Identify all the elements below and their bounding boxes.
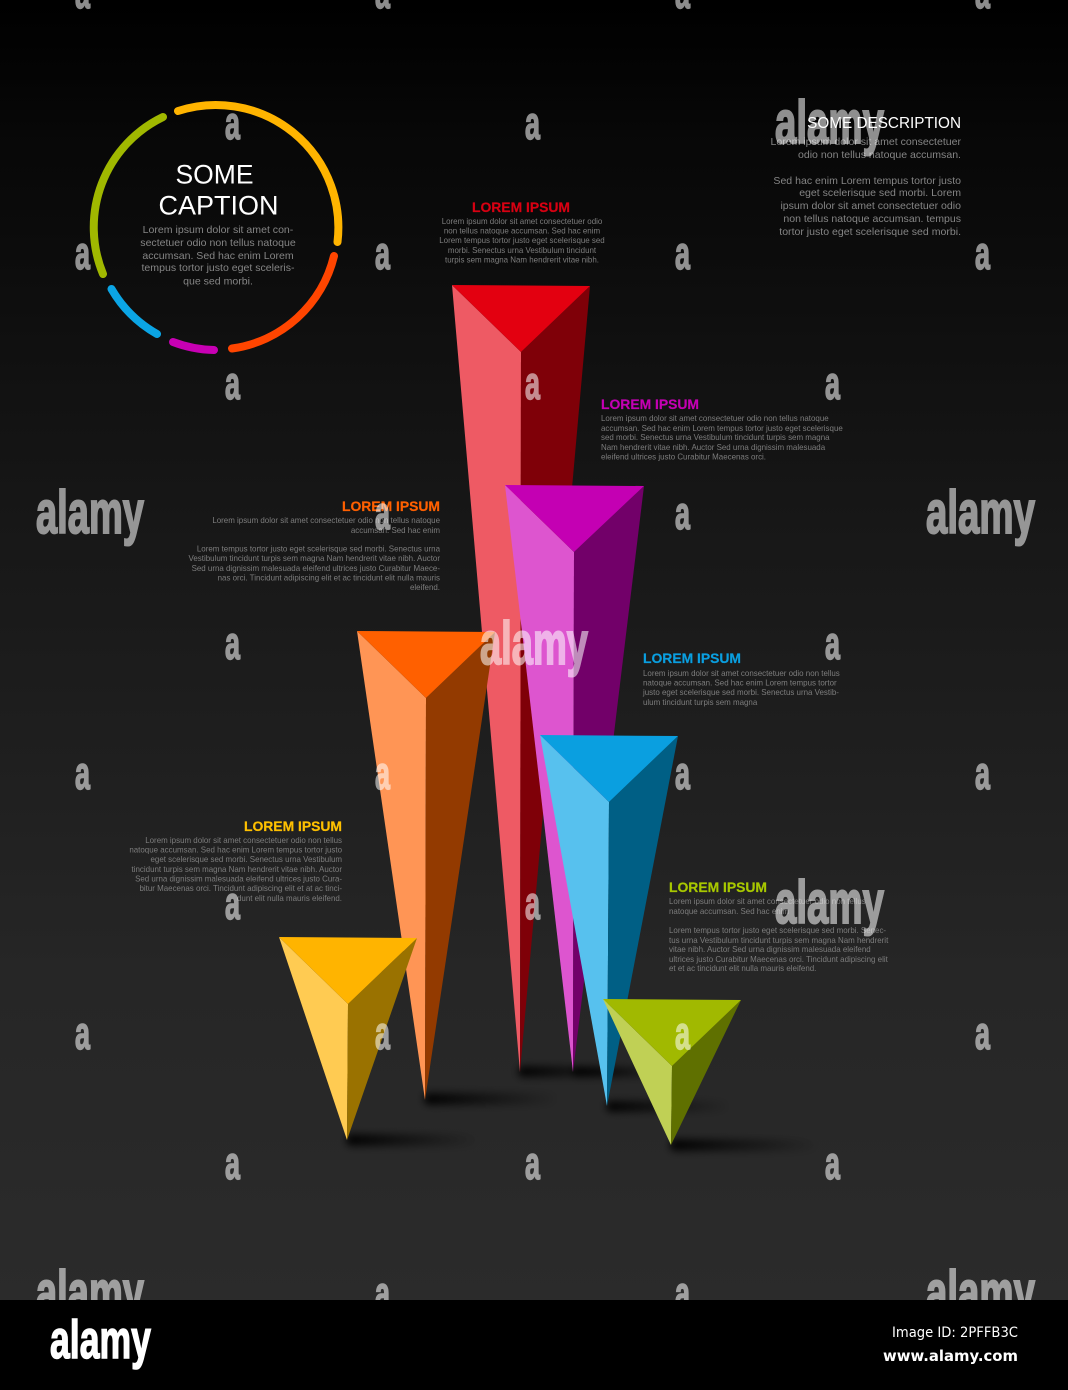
description body: ipsum dolor sit amet consectetuer odio [780, 200, 961, 212]
footer bar [0, 1300, 1068, 1390]
watermark overlay: a [975, 747, 990, 799]
watermark overlay: a [375, 227, 390, 279]
caption heading: SOME [175, 160, 254, 190]
watermark overlay: a [75, 747, 90, 799]
pyramid: magenta [505, 485, 644, 1072]
watermark overlay: a [225, 357, 240, 409]
watermark overlay: a [825, 1137, 840, 1189]
description heading: SOME DESCRIPTION [807, 115, 961, 132]
heading: LOREM IPSUM [472, 199, 570, 215]
caption body: que sed morbi. [183, 276, 253, 288]
body: Lorem ipsum dolor sit amet consectetuer odio non tellus natoque [212, 516, 441, 525]
yellow label [129, 818, 343, 903]
body: Nam hendrerit vitae nibh. Auctor Sed urna dignissim malesuada [601, 443, 826, 452]
body: eleifend. [410, 583, 440, 592]
watermark overlay: a [375, 487, 390, 539]
body: eget scelerisque sed morbi. Senectus urna Vestibulum [150, 855, 342, 864]
description body: non tellus natoque accumsan. tempus [783, 213, 961, 225]
body: Sed urna dignissim malesuada eleifend ultrices justo Curabitur Maece- [192, 564, 440, 573]
caption body: sectetuer odio non tellus natoque [140, 237, 296, 249]
watermark overlay: a [225, 617, 240, 669]
heading: LOREM IPSUM [601, 396, 699, 412]
body: Vestibulum tincidunt turpis sem magna Nam hendrerit vitae nibh. Auctor [189, 554, 440, 563]
watermark overlay: a [225, 877, 240, 929]
footer logo: alamy [50, 1310, 151, 1370]
body: natoque accumsan. Sed hac enim Lorem tempus tortor justo [129, 846, 343, 854]
body: Lorem tempus tortor justo eget scelerisque sed morbi. Senec- [669, 926, 886, 935]
body: Lorem ipsum dolor sit amet consectetuer odio [442, 217, 603, 226]
watermark overlay: a [675, 1007, 690, 1059]
watermark overlay: alamy [775, 89, 884, 156]
description body: tortor justo eget scelerisque sed morbi. [779, 226, 961, 238]
watermark overlay: alamy [36, 1259, 144, 1326]
watermark overlay: a [675, 227, 690, 279]
watermark overlay: a [375, 747, 390, 799]
caption body: Lorem ipsum dolor sit amet con- [143, 224, 294, 236]
watermark overlay: a [675, 747, 690, 799]
body: Lorem ipsum dolor sit amet consectetuer odio non tellus [643, 669, 840, 678]
watermark overlay: a [75, 1007, 90, 1059]
body: Lorem ipsum dolor sit amet consectetuer odio non tellus [669, 897, 866, 906]
description block [770, 115, 961, 238]
body: accumsan. Sed hac enim [351, 526, 440, 535]
watermark overlay: a [375, 1007, 390, 1059]
heading: LOREM IPSUM [643, 650, 741, 666]
body: nas orci. Tincidunt adipiscing elit et ac tincidunt elit nulla mauris [218, 574, 440, 582]
body: Sed urna dignissim malesuada eleifend ultrices justo Cura- [135, 874, 342, 884]
watermark overlay: alamy [480, 610, 588, 677]
body: tincidunt turpis sem magna Nam hendrerit vitae nibh. Auctor [132, 865, 342, 874]
watermark overlay: a [525, 1137, 540, 1189]
body: justo eget scelerisque sed morbi. Senectus urna Vestib- [642, 688, 839, 697]
circular caption badge [94, 105, 338, 350]
body: Lorem ipsum dolor sit amet consectetuer odio non tellus [145, 836, 342, 845]
watermark overlay: a [975, 227, 990, 279]
watermark overlay: a [675, 487, 690, 539]
watermark overlay: a [825, 357, 840, 409]
body: natoque accumsan. Sed hac enim Lorem tempus tortor [643, 678, 837, 688]
body: natoque accumsan. Sed hac enim [669, 907, 789, 916]
watermark overlay: alamy [36, 479, 144, 546]
caption heading: CAPTION [158, 190, 279, 220]
body: morbi. Senectus urna Vestibulum tincidunt [448, 246, 597, 255]
description body: odio non tellus natoque accumsan. [798, 149, 961, 161]
watermark overlay: a [75, 227, 90, 279]
watermark overlay: a [525, 877, 540, 929]
heading: LOREM IPSUM [244, 818, 342, 834]
description body: Lorem ipsum dolor sit amet consectetuer [770, 136, 961, 148]
magenta label [601, 396, 843, 462]
heading: LOREM IPSUM [342, 498, 440, 514]
watermark overlay: a [375, 1267, 390, 1319]
body: turpis sem magna Nam hendrerit vitae nibh. [445, 256, 599, 264]
watermark overlay: a [225, 97, 240, 149]
body: Lorem ipsum dolor sit amet consectetuer odio non tellus natoque [601, 414, 829, 423]
body: tus urna Vestibulum tincidunt turpis sem magna Nam hendrerit [669, 936, 889, 945]
watermark overlay: a [975, 1007, 990, 1059]
watermark overlay: a [525, 97, 540, 149]
pyramid: blue [540, 735, 678, 1106]
watermark overlay: alamy [775, 869, 884, 936]
pyramid: red [452, 285, 590, 1072]
watermark overlay: a [525, 357, 540, 409]
watermark overlay: a [675, 1267, 690, 1319]
watermark overlay: a [825, 617, 840, 669]
body: ulum tincidunt turpis sem magna [643, 698, 758, 707]
body: Lorem tempus tortor justo eget scelerisque sed morbi. Senectus urna [197, 544, 441, 554]
pyramid: yellow [279, 937, 417, 1140]
red label [439, 199, 605, 264]
body: non tellus natoque accumsan. Sed hac enim [444, 227, 600, 236]
body: sed morbi. Senectus urna Vestibulum tincidunt turpis sem magna [601, 433, 830, 442]
body: ultrices justo Curabitur Maecenas orci. Tincidunt adipiscing elit [669, 955, 889, 964]
ground shadows [346, 1066, 820, 1151]
pyramid: green [603, 999, 741, 1145]
image id: Image ID: 2PFFB3C [892, 1325, 1018, 1341]
blue label [642, 650, 840, 707]
ring segments [94, 105, 338, 350]
caption body: accumsan. Sed hac enim Lorem [142, 250, 294, 262]
body: eleifend ultrices justo Curabitur Maecenas orci. [601, 452, 766, 462]
body: bitur Maecenas orci. Tincidunt adipiscing elit et at ac tinci- [139, 884, 342, 893]
orange label [189, 498, 441, 592]
caption body: tempus tortor justo eget sceleris- [142, 262, 295, 274]
heading: LOREM IPSUM [669, 879, 767, 895]
green label [669, 879, 889, 973]
description body: eget scelerisque sed morbi. Lorem [799, 187, 961, 199]
body: vitae nibh. Auctor Sed urna dignissim malesuada eleifend [669, 945, 871, 954]
body: accumsan. Sed hac enim Lorem tempus tortor justo eget scelerisque [601, 424, 843, 433]
site url: www.alamy.com [883, 1347, 1018, 1365]
watermark overlay: a [225, 1137, 240, 1189]
body: dunt elit nulla mauris eleifend. [237, 894, 342, 903]
body: Lorem tempus tortor justo eget scelerisque sed [439, 236, 605, 245]
pyramid: orange [357, 631, 495, 1100]
body: et et ac tincidunt elit nulla mauris eleifend. [669, 964, 816, 973]
description body: Sed hac enim Lorem tempus tortor justo [773, 175, 961, 187]
